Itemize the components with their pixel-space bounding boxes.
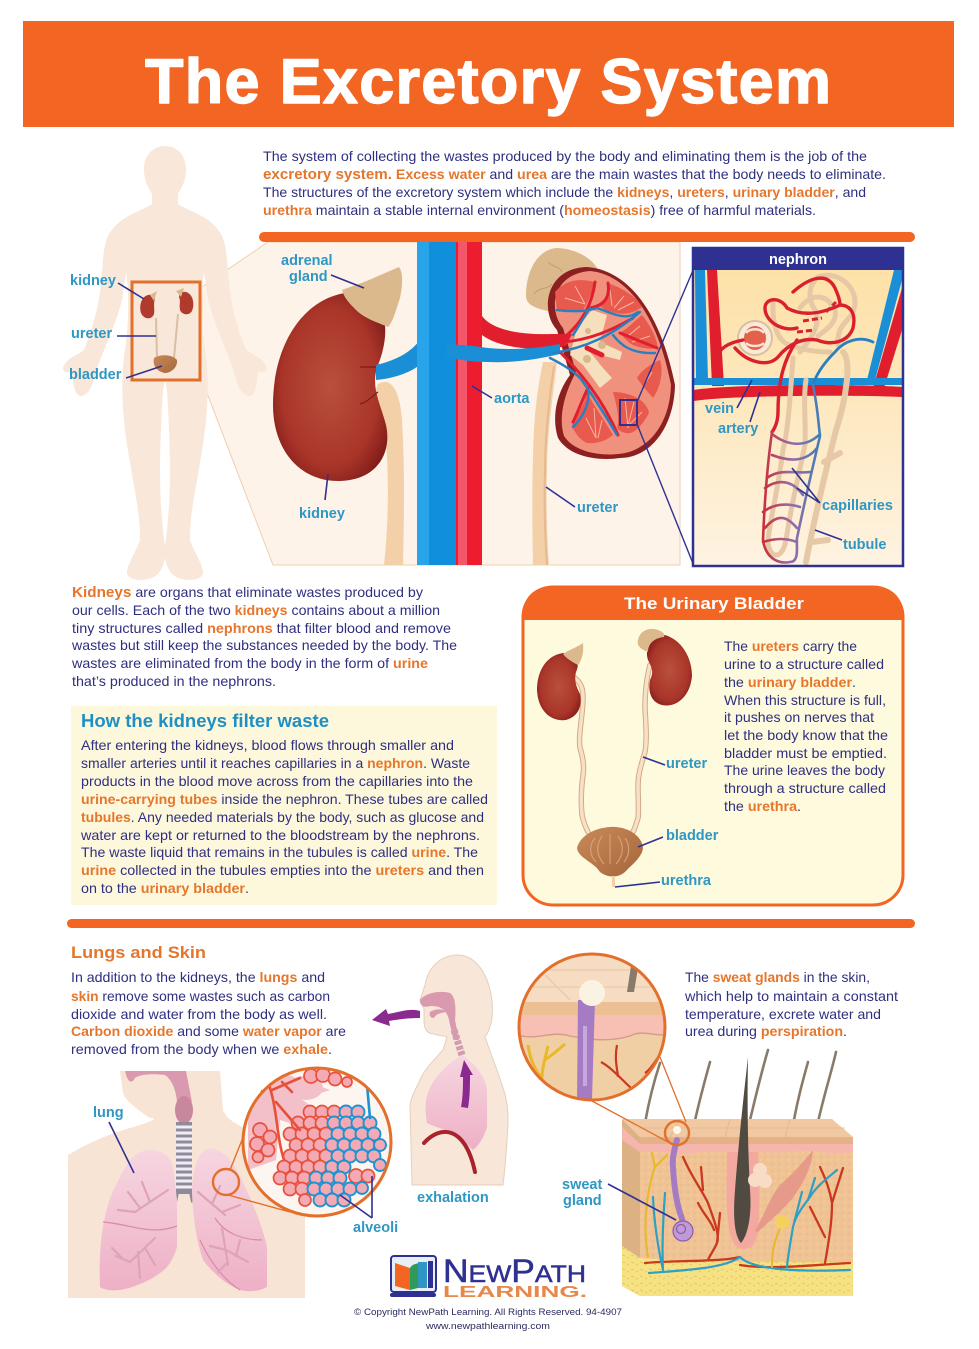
diaphragm [424, 1132, 475, 1172]
renal vein right [446, 344, 560, 362]
urinary system illustration: ureter [666, 756, 707, 772]
paragraph: The waste liquid that remains in the tubules is called urine. The [81, 844, 478, 860]
muscle [755, 1150, 813, 1233]
panel text: it pushes on nerves that [724, 709, 874, 725]
exhale arrow [372, 1009, 420, 1026]
body silhouette [63, 146, 267, 580]
NewPath Learning logo: NEWPATH [443, 1253, 586, 1289]
panel: how the kidneys filter waste [71, 706, 497, 905]
kidney anatomy diagram [273, 242, 694, 566]
heading: How the kidneys filter waste [81, 711, 329, 731]
urinary system illustration [537, 629, 719, 889]
zoom square on kidney [620, 400, 637, 425]
capillary net [763, 385, 820, 562]
lungs paragraph: skin remove some wastes such as carbon [71, 988, 330, 1004]
paragraph: water are kept or returned to the bloodstream by the nephrons. [80, 827, 480, 843]
kidneys paragraph: tiny structures called nephrons that filter blood and remove [72, 620, 451, 636]
panel text: The ureters carry the [724, 638, 857, 654]
up arrow [460, 1060, 473, 1108]
sweat glands paragraph: The sweat glands in the skin, [685, 969, 870, 985]
bronchial branches [112, 1182, 248, 1278]
vessels [695, 270, 708, 380]
paragraph: urine collected in the tubules empties into the ureters and then [81, 862, 484, 878]
labels on kidney diagram: aorta [494, 391, 530, 407]
kidney left vessel stubs [360, 367, 378, 404]
yellow gland [775, 1215, 789, 1229]
glomerulus [738, 321, 772, 355]
skin top face [622, 1119, 853, 1137]
nephron inset [693, 248, 903, 566]
vessels [645, 1157, 850, 1267]
renal vessels [560, 282, 657, 435]
orange divider bar top [259, 232, 915, 242]
labels [93, 1105, 398, 1236]
hairs [645, 1050, 836, 1132]
panel text: bladder must be emptied. [724, 745, 887, 761]
panel header [522, 586, 904, 620]
right lung [192, 1148, 267, 1291]
lung [426, 1055, 487, 1150]
left renal vein [376, 333, 426, 380]
panel text: the urethra. [724, 798, 801, 814]
throat [125, 1071, 192, 1102]
nephron labels: capillaries [822, 498, 893, 514]
kidneys paragraph: that’s produced in the nephrons. [72, 673, 276, 689]
intro text block: excretory system. Excess water and urea are the main wastes that the body needs to eliminate. [263, 166, 886, 183]
air tubes [268, 1078, 300, 1160]
nasal passage [420, 992, 459, 1040]
labels on kidney diagram: adrenal [281, 253, 333, 269]
labels on body: ureter [71, 326, 112, 342]
lungs paragraph: removed from the body when we exhale. [71, 1041, 332, 1057]
trachea [454, 1030, 462, 1055]
skin body [640, 1137, 853, 1296]
lungs paragraph: dioxide and water from the body as well. [71, 1006, 327, 1022]
paragraph: smaller arteries until it reaches capillaries in a nephron. Waste [81, 755, 470, 771]
kidneys paragraph [71, 584, 457, 689]
panel text: The urine leaves the body [724, 762, 885, 778]
kidney left [273, 293, 387, 481]
paragraph: products in the blood move across from the capillaries into the [81, 773, 473, 789]
ureter left [374, 382, 404, 565]
fat layer [622, 1246, 853, 1296]
sweat duct [673, 1140, 683, 1225]
kidneys paragraph: Kidneys are organs that eliminate wastes produced by [72, 584, 423, 601]
exhalation figure [372, 955, 508, 1206]
panel text: the urinary bladder. [724, 674, 856, 690]
sweat gland label: sweat [562, 1177, 602, 1193]
sweat glands paragraph: temperature, excrete water and [685, 1006, 881, 1022]
body organs and highlight box [132, 282, 200, 380]
skin illustration [515, 954, 853, 1296]
nephron labels [705, 380, 893, 553]
panel text: urine to a structure called [724, 656, 884, 672]
red alveoli [250, 1068, 374, 1206]
nephron labels: vein [705, 401, 734, 417]
lungs and skin heading: Lungs and Skin [71, 943, 206, 962]
left lung [100, 1150, 177, 1290]
kidney lobe rays [565, 286, 652, 438]
urinary system illustration: bladder [666, 828, 719, 844]
zoom connector [592, 1057, 686, 1142]
copyright: www.newpathlearning.com [425, 1321, 550, 1332]
labels on body: kidney [70, 273, 116, 289]
vena cava [417, 242, 456, 565]
NewPath Learning logo: LEARNING. [443, 1284, 587, 1301]
blue alveoli [308, 1106, 386, 1206]
panel: the urinary bladder: The Urinary Bladder [624, 594, 804, 613]
zoom panel background [202, 242, 680, 565]
labels on body [69, 273, 162, 383]
sweat glands paragraph: urea during perspiration. [685, 1023, 847, 1039]
labels: lung [93, 1105, 124, 1121]
title banner: The Excretory System [145, 47, 831, 117]
kidney lobes [555, 280, 662, 443]
panel: the urinary bladder [522, 586, 904, 905]
kidneys paragraph: our cells. Each of the two kidneys contains about a million [72, 602, 440, 618]
lungs paragraph: In addition to the kidneys, the lungs and [71, 969, 325, 985]
labels on kidney diagram [281, 253, 618, 522]
paragraph [80, 737, 488, 896]
kidney right [548, 267, 675, 459]
alveoli magnified circle [243, 1068, 391, 1216]
nephron header [693, 248, 903, 270]
blue venule [813, 339, 873, 385]
adrenal gland left [342, 267, 402, 327]
labels on kidney diagram: gland [289, 269, 328, 285]
lungs paragraph [71, 969, 346, 1057]
trachea [176, 1122, 192, 1194]
kidneys paragraph: wastes but still keep the substances needed by the body. The [71, 637, 457, 653]
border [693, 248, 903, 566]
zoom connector [228, 1090, 290, 1212]
labels: alveoli [353, 1220, 398, 1236]
tubules [768, 275, 855, 555]
aorta [456, 242, 482, 565]
copyright: © Copyright NewPath Learning. All Rights Reserved. 94-4907 [354, 1307, 622, 1318]
follicle [727, 1152, 759, 1249]
right kidney ureter [532, 362, 557, 565]
panel text: When this structure is full, [724, 692, 886, 708]
sweat glands paragraph [684, 969, 898, 1039]
orange divider bar middle [67, 919, 915, 928]
renal artery [482, 316, 572, 349]
panel text: through a structure called [724, 780, 886, 796]
exhalation figure: exhalation [417, 1190, 489, 1206]
lungs paragraph: Carbon dioxide and some water vapor are [71, 1023, 346, 1039]
intro text block [263, 148, 886, 218]
paragraph: urine-carrying tubes inside the nephron. These tubes are called [81, 791, 488, 807]
oil gland [753, 1163, 767, 1177]
renal pelvis [570, 310, 622, 388]
labels on body: bladder [69, 367, 122, 383]
panel text: let the body know that the [724, 727, 888, 743]
intro text block: urethra maintain a stable internal environment (homeostasis) free of harmful materials. [263, 202, 816, 218]
labels on kidney diagram: ureter [577, 500, 618, 516]
kidneys paragraph: wastes are eliminated from the body in the form of urine [71, 655, 428, 671]
panel text [724, 638, 888, 814]
nephron labels: artery [718, 421, 758, 437]
paragraph: on to the urinary bladder. [81, 880, 249, 896]
labels on kidney diagram: kidney [299, 506, 345, 522]
urinary system illustration: urethra [661, 873, 712, 889]
zoom connector lines [637, 268, 694, 566]
nephron labels: tubule [843, 537, 886, 553]
intro text block: The system of collecting the wastes produced by the body and eliminating them is the job of the [263, 148, 867, 164]
nephron inset: nephron [769, 252, 827, 268]
title banner [23, 21, 954, 127]
skin magnified circle [515, 954, 670, 1100]
red arterioles [717, 278, 854, 432]
sweat glands paragraph: which help to maintain a constant [684, 988, 898, 1004]
paragraph: After entering the kidneys, blood flows through smaller and [81, 737, 454, 753]
sweat gland label [562, 1177, 676, 1220]
copyright [354, 1307, 622, 1332]
intro text block: The structures of the excretory system which include the kidneys, ureters, urinary bladder, and [263, 184, 866, 200]
NewPath Learning logo [390, 1253, 587, 1301]
adrenal gland right [526, 248, 597, 313]
sweat gland label: gland [563, 1193, 602, 1209]
lung illustration [68, 1068, 398, 1298]
paragraph: tubules. Any needed materials by the body, such as glucose and [81, 809, 484, 825]
